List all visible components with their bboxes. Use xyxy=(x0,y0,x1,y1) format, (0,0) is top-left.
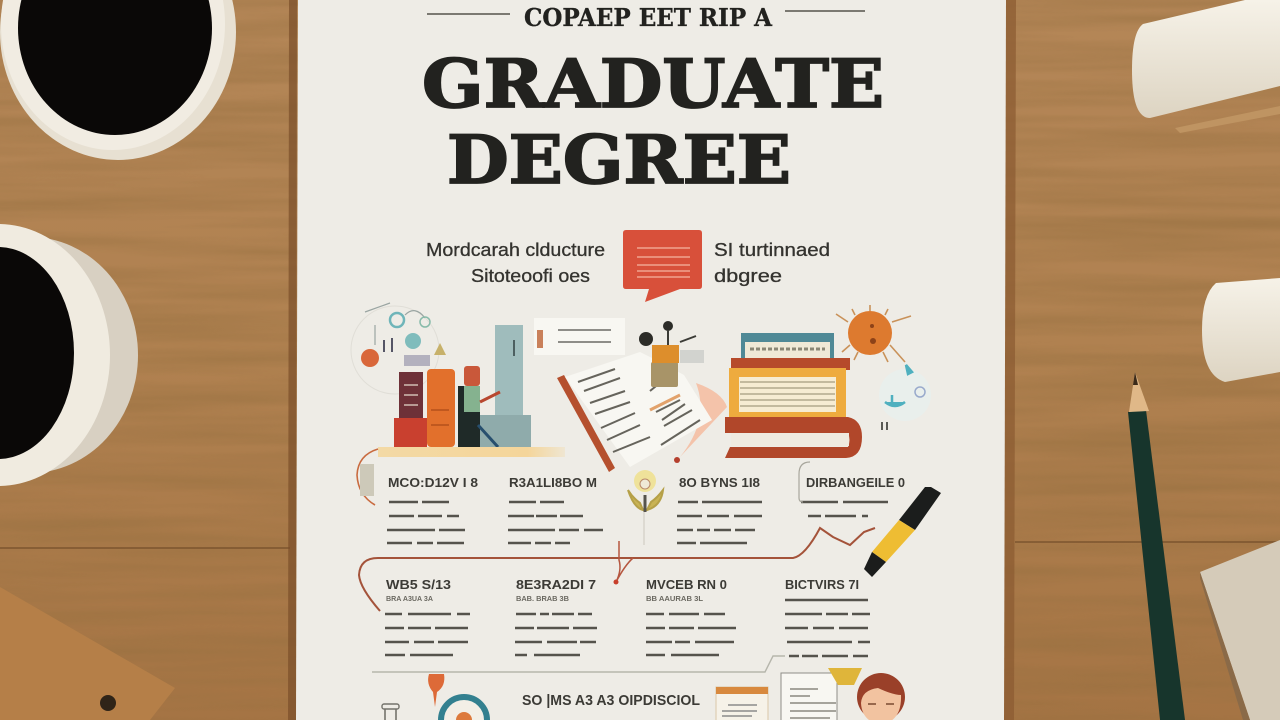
column 1 text: MCO:D12V I 8 xyxy=(388,475,478,490)
column 2 text xyxy=(515,577,597,655)
shelf and curve xyxy=(357,447,565,505)
document icon xyxy=(781,673,837,720)
intro text right: SI turtinnaed xyxy=(714,240,830,260)
book stack and figure left xyxy=(394,325,531,447)
column 4 text: BICTVIRS 7I xyxy=(785,577,859,592)
person avatar xyxy=(857,673,905,720)
doodle cluster left xyxy=(351,303,446,394)
intro text left: Sitoteoofi oes xyxy=(471,266,590,286)
column 3 text: BB AAURAB 3L xyxy=(646,596,704,603)
bottom caption: SO |MS A3 A3 OIPDISCIOL xyxy=(522,692,700,709)
note card xyxy=(534,318,704,363)
column 3 text xyxy=(646,577,736,655)
intro text left xyxy=(426,240,605,286)
column 2 text: 8E3RA2DI 7 xyxy=(516,577,596,592)
column 2 text xyxy=(508,475,603,543)
timeline connector xyxy=(359,528,875,611)
paper roll right xyxy=(1202,278,1280,382)
column 3 text xyxy=(677,475,762,543)
column 2 text: BAB. BRAB 3B xyxy=(516,596,569,603)
pin icon xyxy=(428,674,444,707)
title: DEGREE xyxy=(447,121,791,199)
yellow cup icon xyxy=(828,668,862,685)
marker pen xyxy=(864,487,941,577)
intro text left: Mordcarah clducture xyxy=(426,240,605,260)
coffee cup top left xyxy=(0,0,236,160)
column 2 text: R3A1LI8BO M xyxy=(509,475,597,490)
column 1 text xyxy=(387,475,478,543)
title: GRADUATE xyxy=(422,45,884,123)
red speech bubble xyxy=(623,230,702,302)
stacked books right xyxy=(725,333,862,458)
tan card bottom left xyxy=(0,587,175,720)
paper roll top right xyxy=(1132,0,1280,133)
bottom divider xyxy=(372,656,785,672)
column 1 text xyxy=(385,577,470,655)
clipboard icon xyxy=(716,687,768,720)
title xyxy=(422,45,884,199)
header rules and kicker xyxy=(427,3,865,32)
lightbulb icon xyxy=(628,470,663,545)
column 4 text xyxy=(799,462,905,516)
column 1 text: BRA A3UA 3A xyxy=(386,596,433,603)
stool icon xyxy=(382,704,399,720)
section row 2 xyxy=(385,577,870,656)
column 3 text: MVCEB RN 0 xyxy=(646,577,727,592)
column 4 text: DIRBANGEILE 0 xyxy=(806,475,905,490)
notebook bottom right xyxy=(1200,540,1280,720)
orange figure on book xyxy=(639,321,696,387)
pencil xyxy=(1128,372,1185,720)
column 4 text xyxy=(785,577,870,656)
coffee cup left xyxy=(0,224,138,486)
sun icon xyxy=(836,305,911,362)
teal ring icon xyxy=(441,697,487,720)
intro text right xyxy=(714,240,830,286)
section row 1 xyxy=(387,462,905,545)
column 3 text: 8O BYNS 1I8 xyxy=(679,475,760,490)
intro text right: dbgree xyxy=(714,266,782,286)
header rules and kicker: COPAEP EET RIP A xyxy=(524,3,772,32)
column 1 text: WB5 S/13 xyxy=(386,577,451,592)
open book xyxy=(557,352,727,472)
paper sheet xyxy=(288,0,1016,720)
teal doodles right xyxy=(879,365,931,430)
